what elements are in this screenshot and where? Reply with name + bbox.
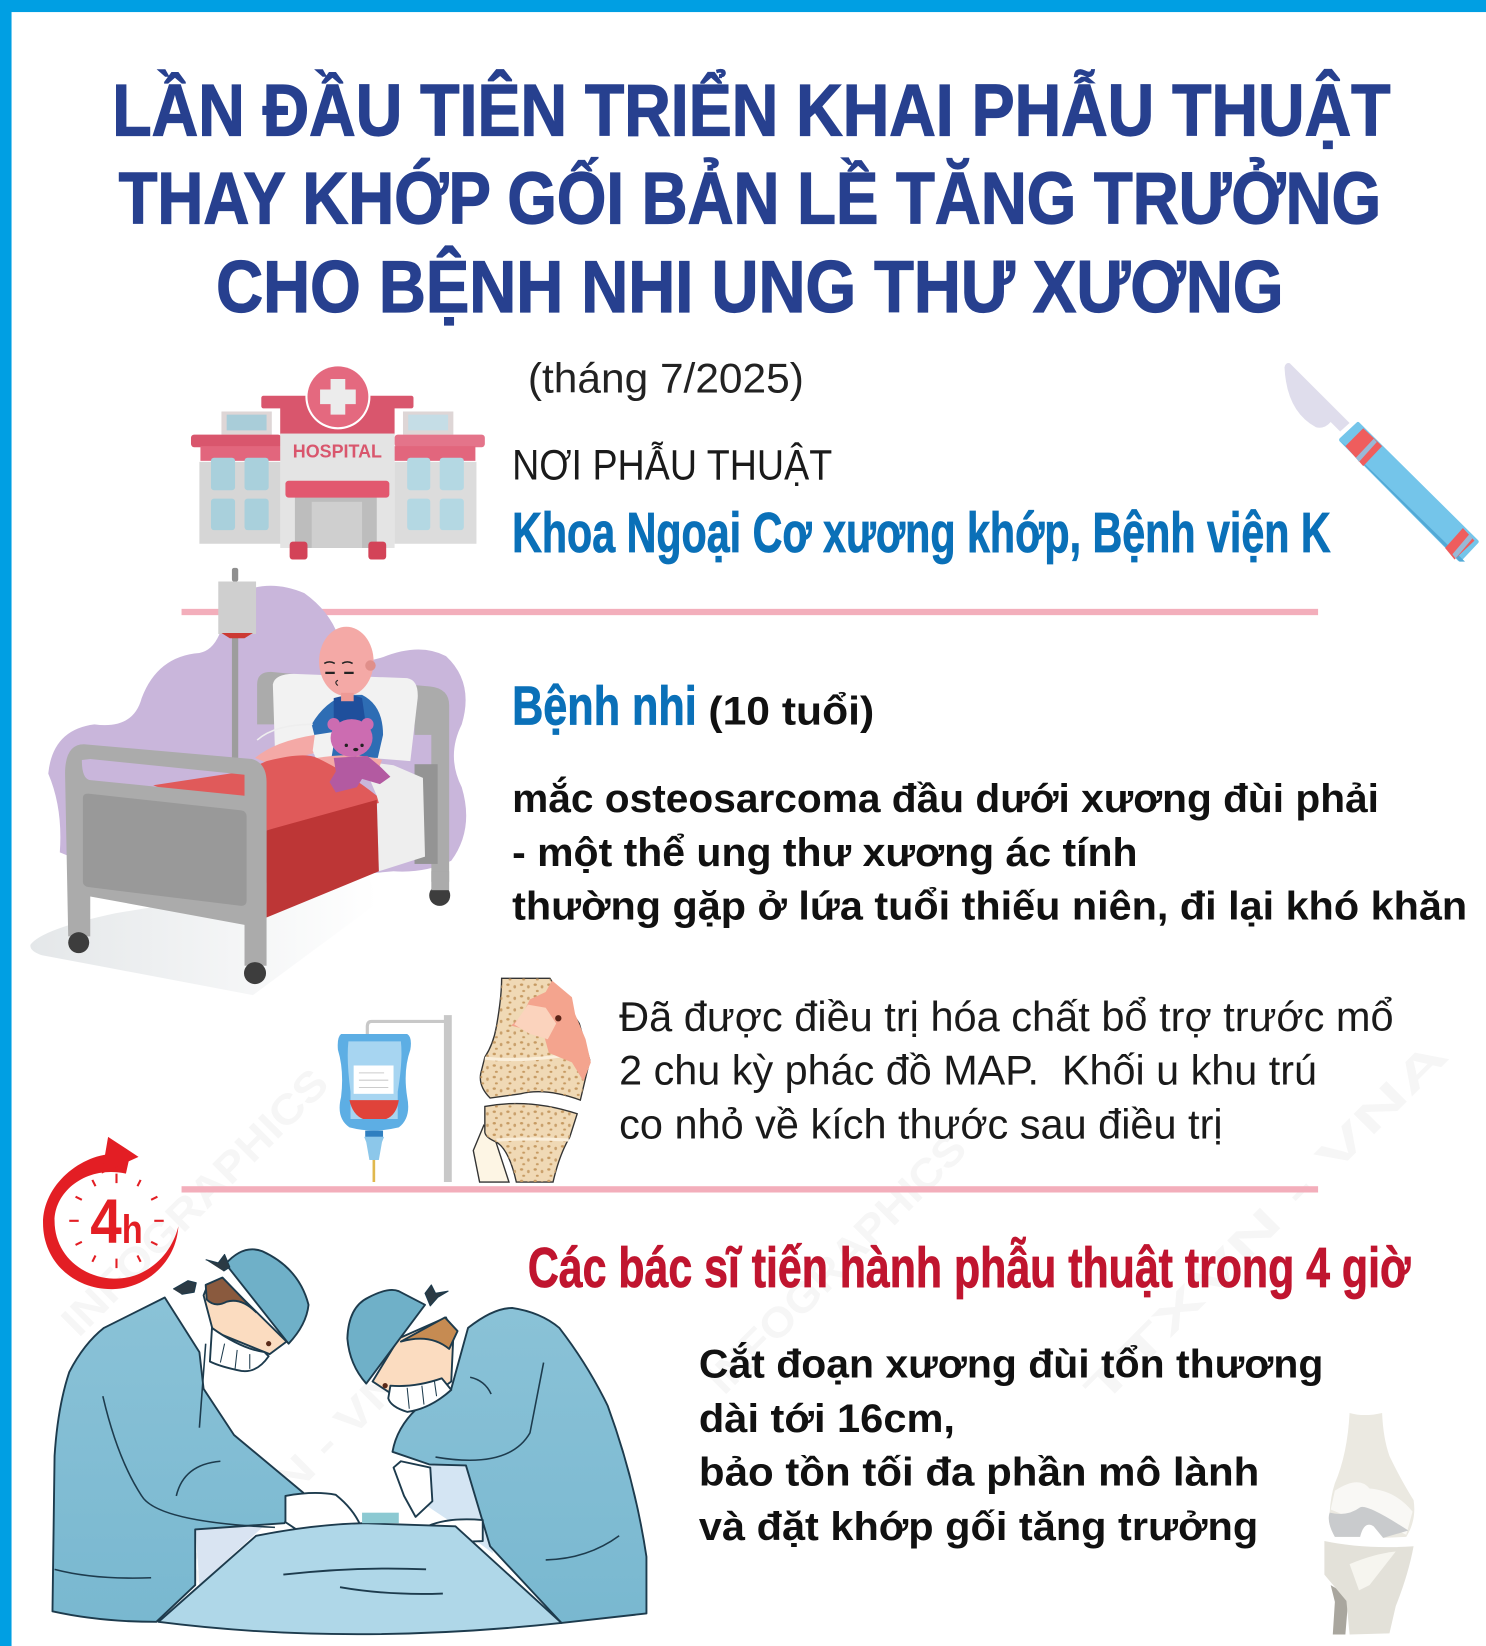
icon: hospital: HOSPITAL xyxy=(293,441,382,462)
red blanket xyxy=(153,755,379,830)
icon: chemotherapy iv bag xyxy=(338,1015,452,1182)
date: (tháng 7/2025) xyxy=(528,355,804,402)
label: place of surgery: NƠI PHẪU THUẬT xyxy=(512,441,832,490)
illustration: child patient in bed xyxy=(30,568,466,995)
text: surgery details: dài tới 16cm, xyxy=(699,1397,955,1441)
text: chemotherapy: co nhỏ về kích thước sau điều trị xyxy=(619,1100,1223,1147)
text: diagnosis: thường gặp ở lứa tuổi thiếu niên, đi lại khó khăn xyxy=(512,885,1467,929)
text: surgery details: bảo tồn tối đa phần mô lành xyxy=(699,1450,1259,1494)
icon: hospital xyxy=(191,364,485,560)
watermark: TTXVN - VNA xyxy=(1075,1031,1457,1413)
patient drape xyxy=(158,1523,561,1634)
text: chemotherapy: 2 chu kỳ phác đồ MAP. Khối u khu trú xyxy=(619,1046,1317,1093)
child xyxy=(255,627,383,772)
text: diagnosis: mắc osteosarcoma đầu dưới xương đùi phải xyxy=(512,775,1379,821)
divider: section one xyxy=(182,609,1318,615)
background light fabric xyxy=(195,1522,262,1585)
text: chemotherapy xyxy=(619,993,1394,1147)
watermark: INFOGRAPHICS xyxy=(52,1059,337,1345)
left surgeon xyxy=(52,1249,309,1622)
watermark: TTXVN - VNA xyxy=(167,1331,438,1602)
icon: 4 hour clock: h xyxy=(122,1208,143,1252)
arm with iv xyxy=(255,735,323,766)
icon: knee joint xyxy=(1324,1413,1414,1634)
white sheet xyxy=(362,761,425,871)
right surgeon xyxy=(347,1285,646,1623)
text: chemotherapy: Đã được điều trị hóa chất bổ trợ trước mổ xyxy=(619,993,1394,1040)
floor shadow xyxy=(30,871,378,995)
bed headboard xyxy=(257,672,449,882)
title: CHO BỆNH NHI UNG THƯ XƯƠNG xyxy=(216,245,1283,328)
watermark: INFOGRAPHICS xyxy=(697,1124,975,1403)
gloved hands xyxy=(285,1461,483,1543)
text: surgery details xyxy=(699,1340,1323,1549)
teddy bear xyxy=(327,718,390,793)
icon: 4 hour clock xyxy=(43,1137,178,1289)
lavender blob xyxy=(48,586,466,892)
heading: patient xyxy=(512,675,874,736)
icon: 4 hour clock: 4 xyxy=(90,1187,122,1257)
text: diagnosis: - một thể ung thư xương ác tính xyxy=(512,831,1138,875)
iv drip stand xyxy=(218,568,256,758)
text: surgery details: và đặt khớp gối tăng trưởng xyxy=(699,1505,1258,1549)
heading: patient: Bệnh nhi xyxy=(512,675,697,736)
text: diagnosis xyxy=(512,775,1467,929)
watermark xyxy=(52,1031,1457,1602)
illustration: two surgeons operating xyxy=(52,1249,646,1634)
wheels xyxy=(68,932,89,953)
heading: patient: (10 tuổi) xyxy=(708,689,874,733)
title xyxy=(112,68,1391,328)
pillow xyxy=(273,674,418,761)
bed footboard xyxy=(65,744,267,966)
divider: section two xyxy=(182,1186,1318,1193)
icon: knee bone with tumor xyxy=(473,978,591,1182)
icon: scalpel xyxy=(1285,363,1477,562)
text: surgery details: Cắt đoạn xương đùi tổn thương xyxy=(699,1340,1323,1386)
